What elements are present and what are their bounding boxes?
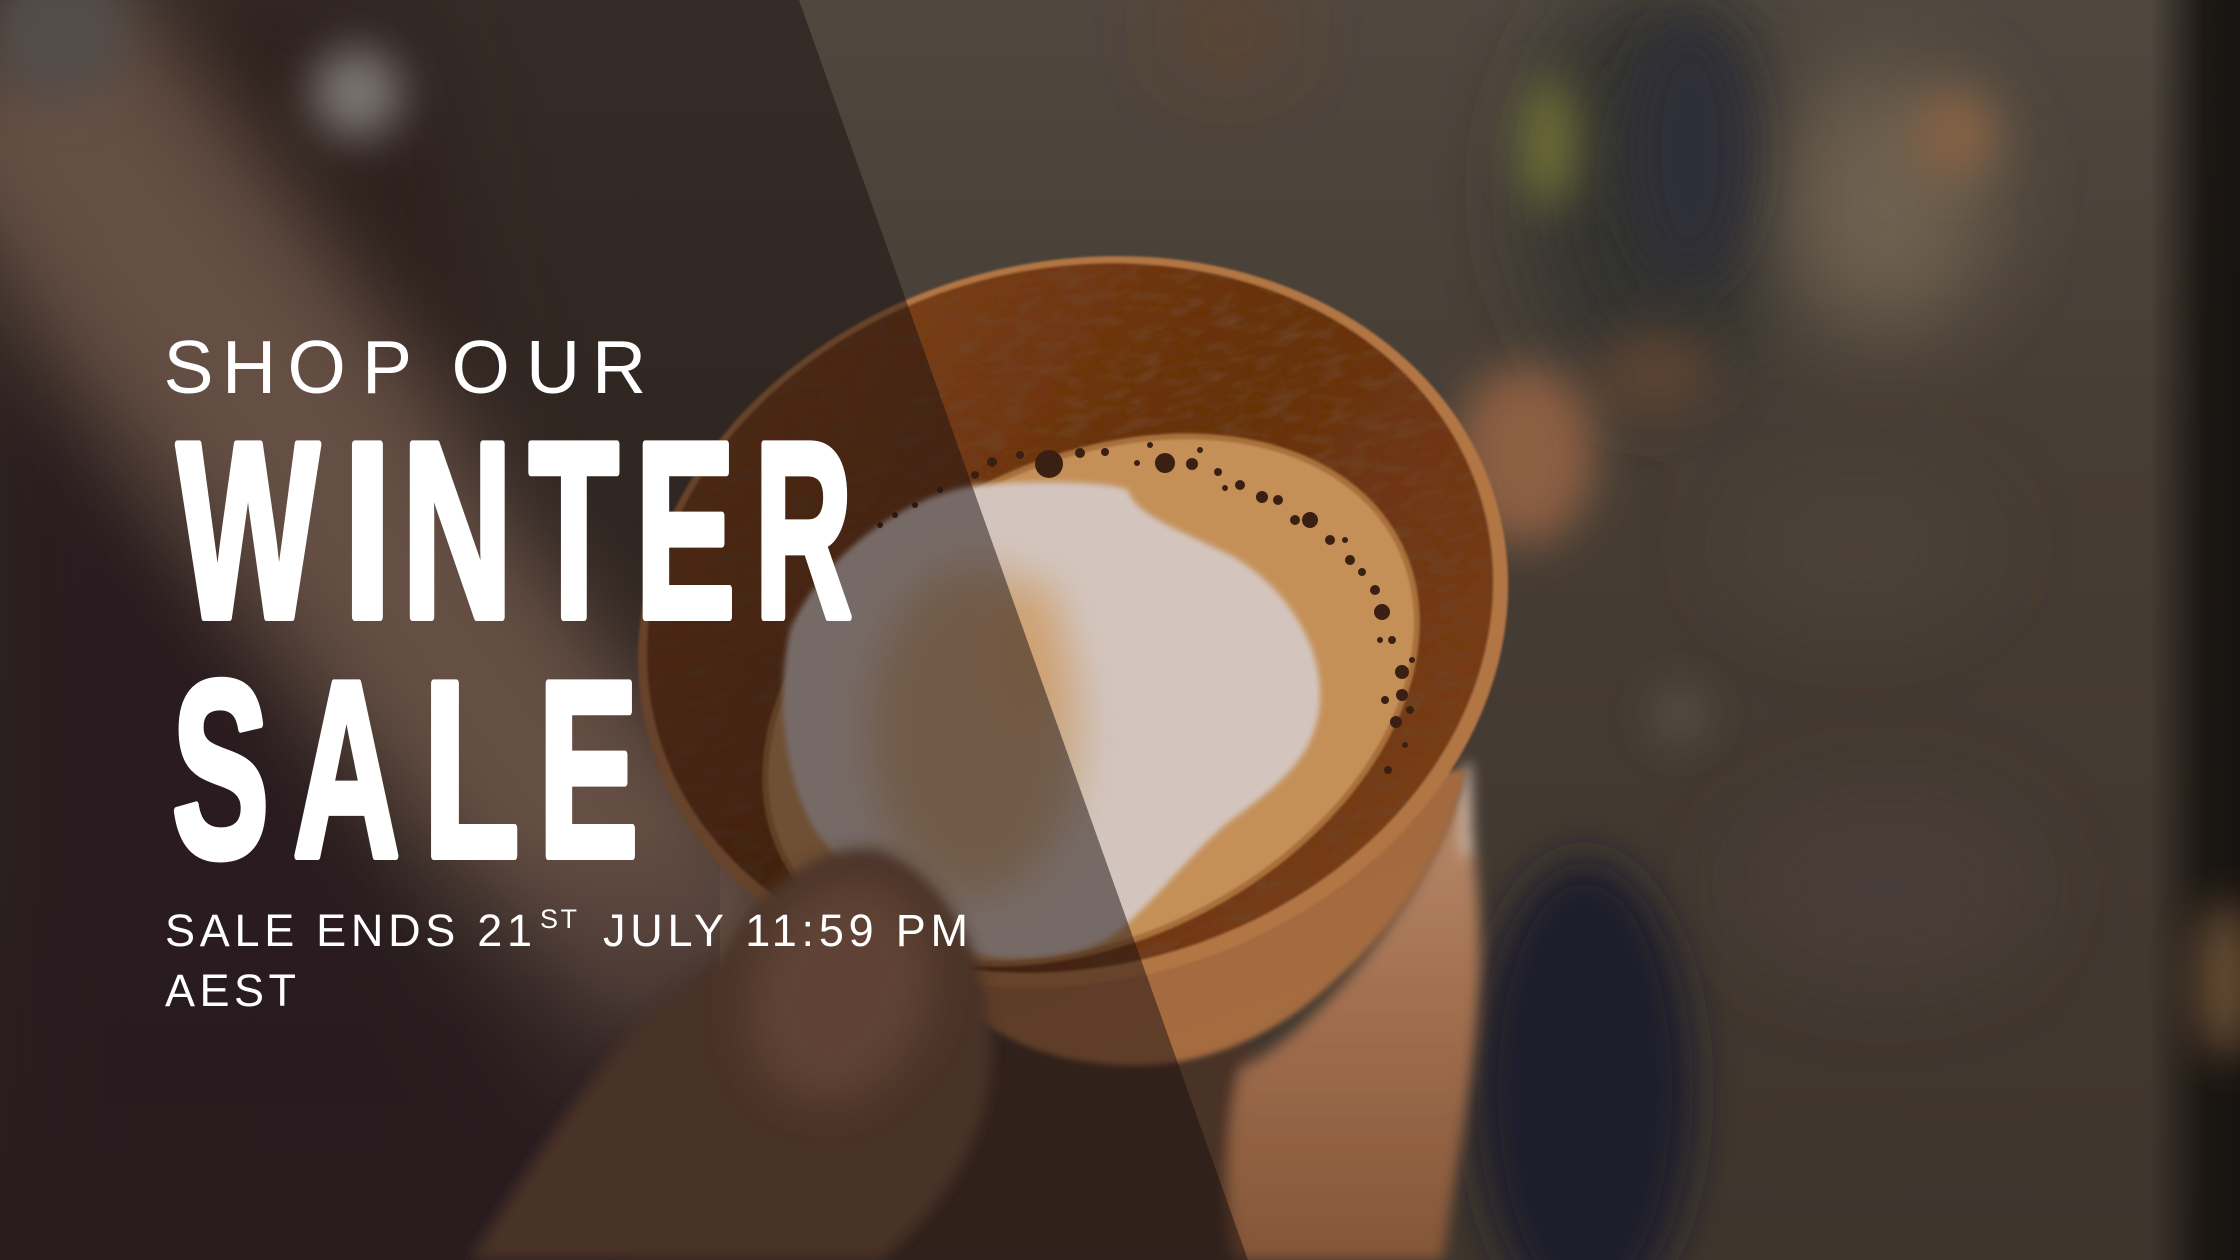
hand holding the cup [620, 760, 1480, 1260]
heading: winter: I [343, 390, 392, 670]
sale end date text: JULY 11:59 PM [603, 905, 968, 956]
heading: sale: A [293, 628, 400, 910]
heading: sale: S [172, 630, 269, 910]
heading: sale: L [423, 630, 520, 910]
heading: winter: R [754, 389, 852, 671]
milk swirl [783, 482, 1320, 958]
sale end date text [165, 904, 968, 1016]
heading: winter [177, 389, 852, 671]
coffee surface [676, 331, 1506, 1069]
heading: winter: N [402, 391, 513, 671]
cup: rim and inner wall [555, 160, 1591, 1084]
heading: shop our: SHOP OUR [164, 325, 646, 409]
cup: outer body [680, 770, 1466, 1065]
heading: winter: W [177, 390, 320, 670]
foam bubbles [877, 442, 1415, 774]
heading: winter: E [635, 390, 735, 670]
thumb in front of cup [470, 848, 992, 1260]
coffee swirl centre [870, 565, 1080, 895]
heading: sale [172, 628, 638, 910]
dark angled overlay panel [0, 0, 1248, 1260]
heading: sale: E [538, 629, 638, 909]
sale end date text: ST [540, 904, 577, 934]
sale end date text: SALE ENDS 21 [165, 905, 532, 956]
sale end date text: AEST [165, 965, 296, 1016]
heading: winter: T [529, 390, 619, 671]
